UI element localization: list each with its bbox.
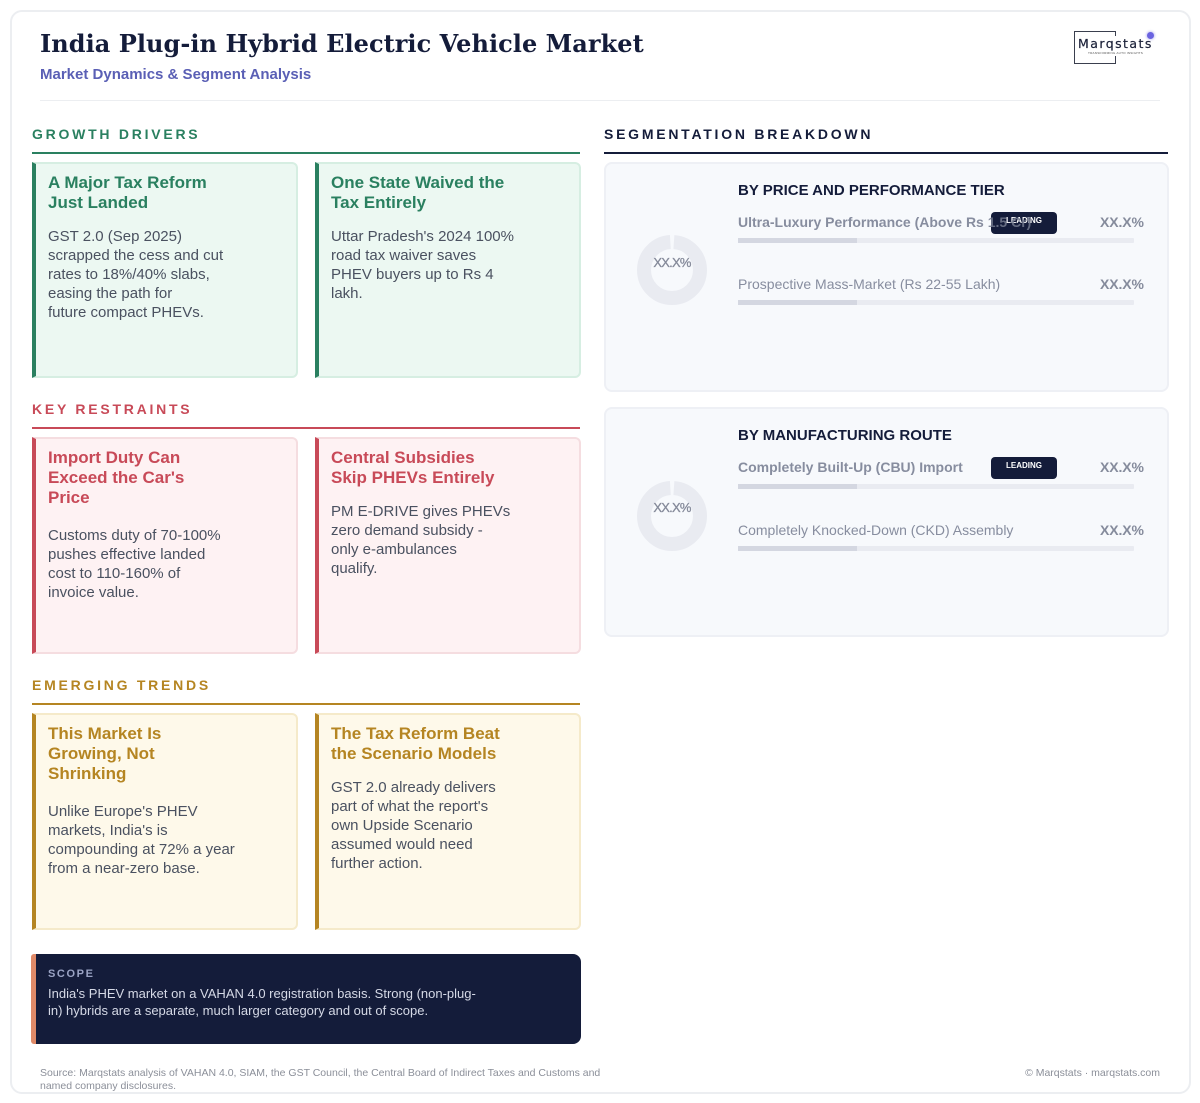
card: import duty: Price — [48, 488, 90, 507]
card: state waiver: lakh. — [331, 285, 363, 302]
donut chart: XX.X% — [653, 255, 692, 270]
section heading: segmentation breakdown — [604, 126, 1168, 154]
value: XX.X% — [1100, 276, 1144, 292]
scope text — [48, 986, 476, 1018]
title: India Plug-in Hybrid Electric Vehicle Market — [40, 29, 644, 58]
section heading: emerging trends: EMERGING TRENDS — [32, 677, 211, 693]
card: tax reform beat scenario: further action. — [331, 855, 423, 872]
card: central subsidies: Skip PHEVs Entirely — [331, 468, 494, 487]
panel heading: BY PRICE AND PERFORMANCE TIER — [738, 182, 1005, 199]
card: growing market: This Market Is — [48, 724, 161, 743]
card: central subsidies — [315, 437, 581, 654]
card: tax reform: easing the path for — [48, 285, 172, 302]
section heading: emerging trends — [32, 677, 580, 705]
scope text: in) hybrids are a separate, much larger category and out of scope. — [48, 1003, 428, 1018]
row: CKD: Completely Knocked-Down (CKD) Assembly — [738, 522, 1013, 538]
donut chart — [637, 481, 707, 551]
card: import duty: Import Duty Can — [48, 448, 180, 467]
card: import duty: cost to 110-160% of — [48, 565, 180, 582]
card: growing market: Growing, Not — [48, 744, 155, 763]
card: import duty: pushes effective landed — [48, 546, 205, 563]
card: import duty: invoice value. — [48, 584, 139, 601]
section heading: key restraints: KEY RESTRAINTS — [32, 401, 192, 417]
card: tax reform beat scenario: assumed would need — [331, 836, 473, 853]
card: state waiver: PHEV buyers up to Rs 4 — [331, 266, 494, 283]
panel: manufacturing route — [604, 407, 1169, 637]
row: mass-market: Prospective Mass-Market (Rs 22-55 Lakh) — [738, 276, 1000, 292]
card: growing market: from a near-zero base. — [48, 860, 200, 877]
logo: Marqstats — [1074, 30, 1156, 64]
card: tax reform: future compact PHEVs. — [48, 304, 204, 321]
section heading: growth drivers — [32, 126, 580, 154]
card: central subsidies: PM E-DRIVE gives PHEVs — [331, 503, 510, 520]
bar — [738, 484, 1134, 489]
card: tax reform beat scenario: part of what the report's — [331, 798, 488, 815]
leading badge: LEADING — [1006, 461, 1042, 470]
card: tax reform: scrapped the cess and cut — [48, 247, 223, 264]
copyright: © Marqstats · marqstats.com — [1025, 1067, 1160, 1079]
donut chart — [637, 235, 707, 305]
card: tax reform beat scenario — [315, 713, 581, 930]
card: tax reform: Just Landed — [48, 193, 148, 212]
panel heading: BY MANUFACTURING ROUTE — [738, 427, 952, 444]
section heading: segmentation breakdown: SEGMENTATION BREAKDOWN — [604, 126, 873, 142]
card: tax reform beat scenario: The Tax Reform Beat — [331, 724, 500, 743]
card: growing market: markets, India's is — [48, 822, 168, 839]
value: XX.X% — [1100, 214, 1144, 230]
card: tax reform beat scenario: the Scenario Models — [331, 744, 496, 763]
leading badge — [991, 457, 1057, 479]
card: growing market — [32, 713, 298, 930]
source note: Source: Marqstats analysis of VAHAN 4.0, SIAM, the GST Council, the Central Board of Indirect Taxes and Customs and — [40, 1067, 600, 1079]
scope callout — [31, 954, 581, 1044]
subtitle: Market Dynamics & Segment Analysis — [40, 66, 311, 83]
panel: price and performance tier — [604, 162, 1169, 392]
card: state waiver: road tax waiver saves — [331, 247, 476, 264]
scope text: India's PHEV market on a VAHAN 4.0 registration basis. Strong (non-plug- — [48, 986, 476, 1001]
card: import duty: Customs duty of 70-100% — [48, 527, 221, 544]
card: state waiver: Uttar Pradesh's 2024 100% — [331, 228, 514, 245]
card: tax reform: A Major Tax Reform — [48, 173, 207, 192]
card: tax reform beat scenario: own Upside Scenario — [331, 817, 473, 834]
bar — [738, 238, 1134, 243]
card: tax reform beat scenario: GST 2.0 already delivers — [331, 779, 496, 796]
card: central subsidies: only e-ambulances — [331, 541, 457, 558]
row: CBU: Completely Built-Up (CBU) Import — [738, 459, 963, 475]
card: state waiver — [315, 162, 581, 378]
card: import duty — [32, 437, 298, 654]
leading badge — [991, 212, 1057, 234]
card: central subsidies: Central Subsidies — [331, 448, 475, 467]
card: state waiver: One State Waived the — [331, 173, 504, 192]
card: growing market: compounding at 72% a year — [48, 841, 235, 858]
bar — [738, 546, 1134, 551]
card: import duty: Exceed the Car's — [48, 468, 184, 487]
donut chart: XX.X% — [653, 500, 692, 515]
value: XX.X% — [1100, 522, 1144, 538]
card: state waiver: Tax Entirely — [331, 193, 426, 212]
section heading: growth drivers: GROWTH DRIVERS — [32, 126, 200, 142]
card: growing market: Unlike Europe's PHEV — [48, 803, 198, 820]
leading badge: LEADING — [1006, 216, 1042, 225]
card: central subsidies: zero demand subsidy - — [331, 522, 483, 539]
card: central subsidies: qualify. — [331, 560, 377, 577]
value: XX.X% — [1100, 459, 1144, 475]
section heading: key restraints — [32, 401, 580, 429]
source note — [40, 1067, 600, 1092]
logo: Marqstats: TRANSFORMING AUTO INSIGHTS — [1088, 51, 1143, 55]
header divider — [40, 100, 1160, 101]
row: ultra-luxury: Ultra-Luxury Performance (Above Rs 1.5 Cr) — [738, 214, 1031, 230]
card: tax reform: rates to 18%/40% slabs, — [48, 266, 210, 283]
card: tax reform — [32, 162, 298, 378]
logo: Marqstats: Marqstats — [1078, 36, 1153, 51]
card: tax reform: GST 2.0 (Sep 2025) — [48, 228, 182, 245]
scope label: SCOPE — [48, 968, 95, 980]
bar — [738, 300, 1134, 305]
card: growing market: Shrinking — [48, 764, 126, 783]
source note: named company disclosures. — [40, 1080, 176, 1092]
